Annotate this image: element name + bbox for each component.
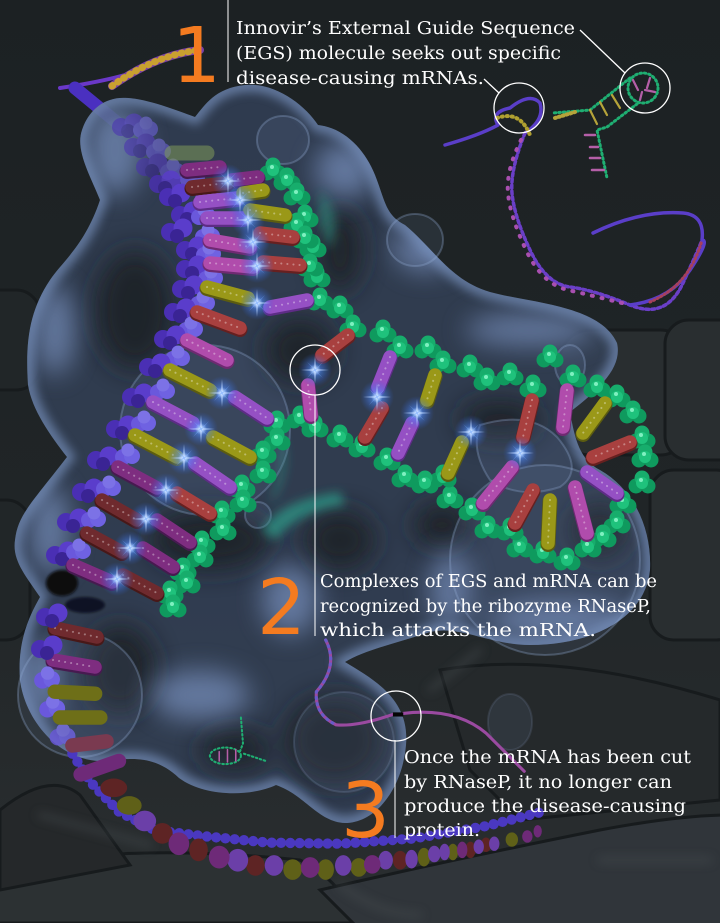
cut mRNA strand (316, 640, 524, 771)
dark holes (46, 570, 105, 613)
lower helix: backbones (46, 378, 328, 618)
callout 3: by RNaseP, it no longer can (404, 773, 672, 793)
callout 2: Complexes of EGS and mRNA can be (320, 572, 657, 592)
free mRNA with EGS target, upper right (445, 99, 704, 309)
number 3: 3 (341, 767, 390, 856)
callout 2 (257, 395, 657, 653)
callout 3: produce the disease-causing (404, 797, 686, 817)
callout 3 (341, 740, 691, 856)
number 1: 1 (172, 12, 221, 101)
upper helix: backbones (112, 114, 366, 378)
highlight circles and leader lines (290, 30, 670, 741)
callout 1: Innovir’s External Guide Sequence (236, 19, 575, 39)
top mRNA strand (60, 50, 200, 125)
callout 1 (172, 0, 575, 101)
callout 2: which attacks the mRNA. (320, 621, 596, 641)
teal surface glow (262, 190, 345, 540)
base pair rungs (53, 167, 630, 668)
loop domain of EGS (326, 320, 658, 570)
translucent RNaseP surface (15, 85, 650, 823)
number 2: 2 (257, 564, 306, 653)
bottom mRNA beaded tail (34, 666, 543, 880)
callout 1: disease-causing mRNAs. (236, 69, 484, 89)
callout 3: Once the mRNA has been cut (404, 748, 691, 768)
bottom mRNA: sphere section (31, 604, 68, 660)
small EGS molecule near bottom (210, 718, 266, 764)
surface bubbles (18, 116, 640, 792)
glowing binding sites (100, 164, 537, 596)
callout 3: protein. (404, 821, 480, 841)
free EGS molecule, upper right (553, 73, 658, 178)
callout 2: recognized by the ribozyme RNaseP, (320, 597, 651, 617)
callout 1: (EGS) molecule seeks out specific (236, 44, 561, 64)
